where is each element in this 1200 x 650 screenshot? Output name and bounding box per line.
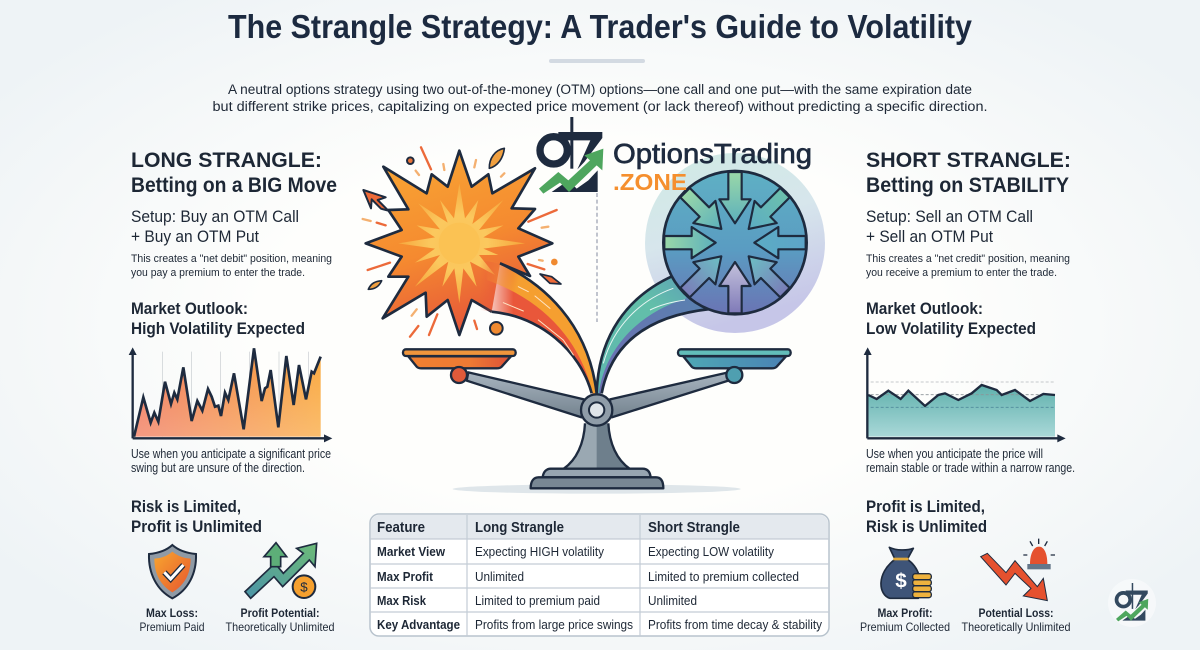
potential loss label: Potential Loss: — [978, 606, 1054, 620]
icon: shield — [149, 545, 196, 598]
short market outlook: Low Volatility Expected — [866, 319, 1036, 338]
logo wordmark: OptionsTrading — [613, 138, 812, 169]
row: max profit: Limited to premium collected — [648, 570, 799, 584]
logo: OptionsTrading.Zone — [539, 117, 812, 195]
illustration: compression disc and halo — [597, 153, 825, 393]
scale pivot — [581, 394, 612, 426]
high volatility chart — [129, 347, 332, 442]
long market outlook: High Volatility Expected — [131, 319, 305, 338]
blue swoosh — [597, 276, 710, 393]
row: max risk: Unlimited — [648, 594, 697, 608]
intro text: A neutral options strategy using two out-of-the-money (OTM) options—one call and one put—with the same expiration date — [228, 82, 972, 97]
scale shadow — [453, 484, 741, 494]
long usage note: swing but are unsure of the direction. — [131, 461, 305, 475]
icon: falling arrow and alarm — [981, 539, 1055, 601]
table frame — [370, 514, 829, 636]
icon: profit arrow and coin: $ — [300, 579, 308, 594]
short market outlook — [866, 299, 1036, 338]
small logo mark — [1108, 579, 1156, 627]
row: market view: Expecting HIGH volatility — [475, 545, 605, 559]
row: key advantage — [377, 618, 823, 632]
long usage note — [131, 447, 331, 475]
long setup: + Buy an OTM Put — [131, 228, 259, 246]
dashed centre line — [596, 193, 598, 322]
scale stand — [563, 423, 630, 469]
short setup note: you receive a premium to enter the trade. — [866, 267, 1057, 279]
burst core rays — [398, 183, 525, 303]
long setup note: you pay a premium to enter the trade. — [131, 267, 305, 279]
intro text: but different strike prices, capitalizing on expected price movement (or lack thereof) without predicting a specific direction. — [212, 99, 988, 114]
short setup: + Sell an OTM Put — [866, 228, 993, 246]
max profit label: Premium Collected — [860, 620, 950, 634]
disc with inward arrows — [663, 171, 807, 314]
short setup — [866, 208, 1033, 246]
left pan — [403, 349, 516, 368]
profit potential label: Theoretically Unlimited — [226, 620, 334, 634]
title: The Strangle Strategy: A Trader's Guide to Volatility — [228, 8, 973, 45]
long setup note — [131, 253, 332, 279]
row: max risk: Max Risk — [377, 594, 426, 608]
halo behind compression disc — [645, 153, 825, 333]
low volatility chart — [864, 347, 1066, 442]
row: key advantage: Key Advantage — [377, 618, 460, 632]
short usage note: Use when you anticipate the price will — [866, 447, 1043, 461]
long market outlook: Market Outlook: — [131, 299, 248, 318]
short setup: Setup: Sell an OTM Call — [866, 208, 1033, 226]
potential loss label: Theoretically Unlimited — [962, 620, 1070, 634]
potential loss label — [962, 606, 1070, 634]
row: market view: Expecting LOW volatility — [648, 545, 775, 559]
long risk heading: Profit is Unlimited — [131, 517, 262, 536]
row: max profit: Unlimited — [475, 570, 524, 584]
short usage note: remain stable or trade within a narrow range. — [866, 461, 1075, 475]
row: key advantage: Profits from time decay & stability — [648, 618, 823, 632]
profit potential label: Profit Potential: — [240, 606, 320, 620]
row: market view: Market View — [377, 545, 445, 559]
title divider — [549, 59, 645, 63]
comparison table: Short Strangle — [648, 519, 740, 536]
long risk heading: Risk is Limited, — [131, 497, 241, 516]
short market outlook: Market Outlook: — [866, 299, 983, 318]
row: max profit — [377, 570, 799, 584]
profit potential label — [226, 606, 334, 634]
max loss label — [140, 606, 204, 634]
comparison table: Feature — [377, 519, 425, 536]
burst sparks — [368, 147, 557, 337]
long risk heading — [131, 497, 262, 536]
short usage note — [866, 447, 1075, 475]
max loss label: Max Loss: — [146, 606, 198, 620]
logo .ZONE: .ZONE — [613, 169, 687, 195]
long strangle heading: Betting on a BIG Move — [131, 174, 337, 197]
comparison table: Long Strangle — [475, 519, 564, 536]
right pan — [678, 349, 791, 368]
short strangle heading: Betting on STABILITY — [866, 174, 1069, 197]
orange swoosh — [480, 260, 597, 393]
row: max risk — [377, 594, 697, 608]
row: max profit: Max Profit — [377, 570, 434, 584]
short risk heading: Profit is Limited, — [866, 497, 985, 516]
long setup note: This creates a "net debit" position, meaning — [131, 253, 332, 265]
panel: short strangle — [860, 148, 1075, 634]
short strangle heading — [866, 148, 1071, 197]
intro text — [212, 82, 988, 114]
row: max risk: Limited to premium paid — [475, 594, 600, 608]
short setup note: This creates a "net credit" position, meaning — [866, 253, 1070, 265]
short strangle heading: SHORT STRANGLE: — [866, 148, 1071, 172]
long strangle heading — [131, 148, 337, 197]
long market outlook — [131, 299, 305, 338]
long setup: Setup: Buy an OTM Call — [131, 208, 299, 226]
icon: money bag and coins: $ — [895, 569, 907, 592]
icon: profit arrow and coin — [245, 543, 317, 598]
illustration: balance scale — [403, 349, 791, 494]
panel: long strangle — [129, 148, 337, 634]
table header — [371, 515, 828, 539]
comparison table — [370, 514, 829, 636]
logo mark — [539, 117, 603, 194]
scale beam — [467, 372, 584, 417]
short risk heading: Risk is Unlimited — [866, 517, 987, 536]
max profit label — [860, 606, 950, 634]
short risk heading — [866, 497, 987, 536]
long strangle heading: LONG STRANGLE: — [131, 148, 322, 172]
max profit label: Max Profit: — [878, 606, 932, 620]
long setup — [131, 208, 299, 246]
row: key advantage: Profits from large price swings — [475, 618, 633, 632]
illustration: explosion burst — [363, 147, 561, 337]
long usage note: Use when you anticipate a significant price — [131, 447, 331, 461]
short setup note — [866, 253, 1070, 279]
max loss label: Premium Paid — [140, 620, 204, 634]
icon: money bag and coins — [881, 547, 931, 598]
row: market view — [377, 545, 775, 559]
